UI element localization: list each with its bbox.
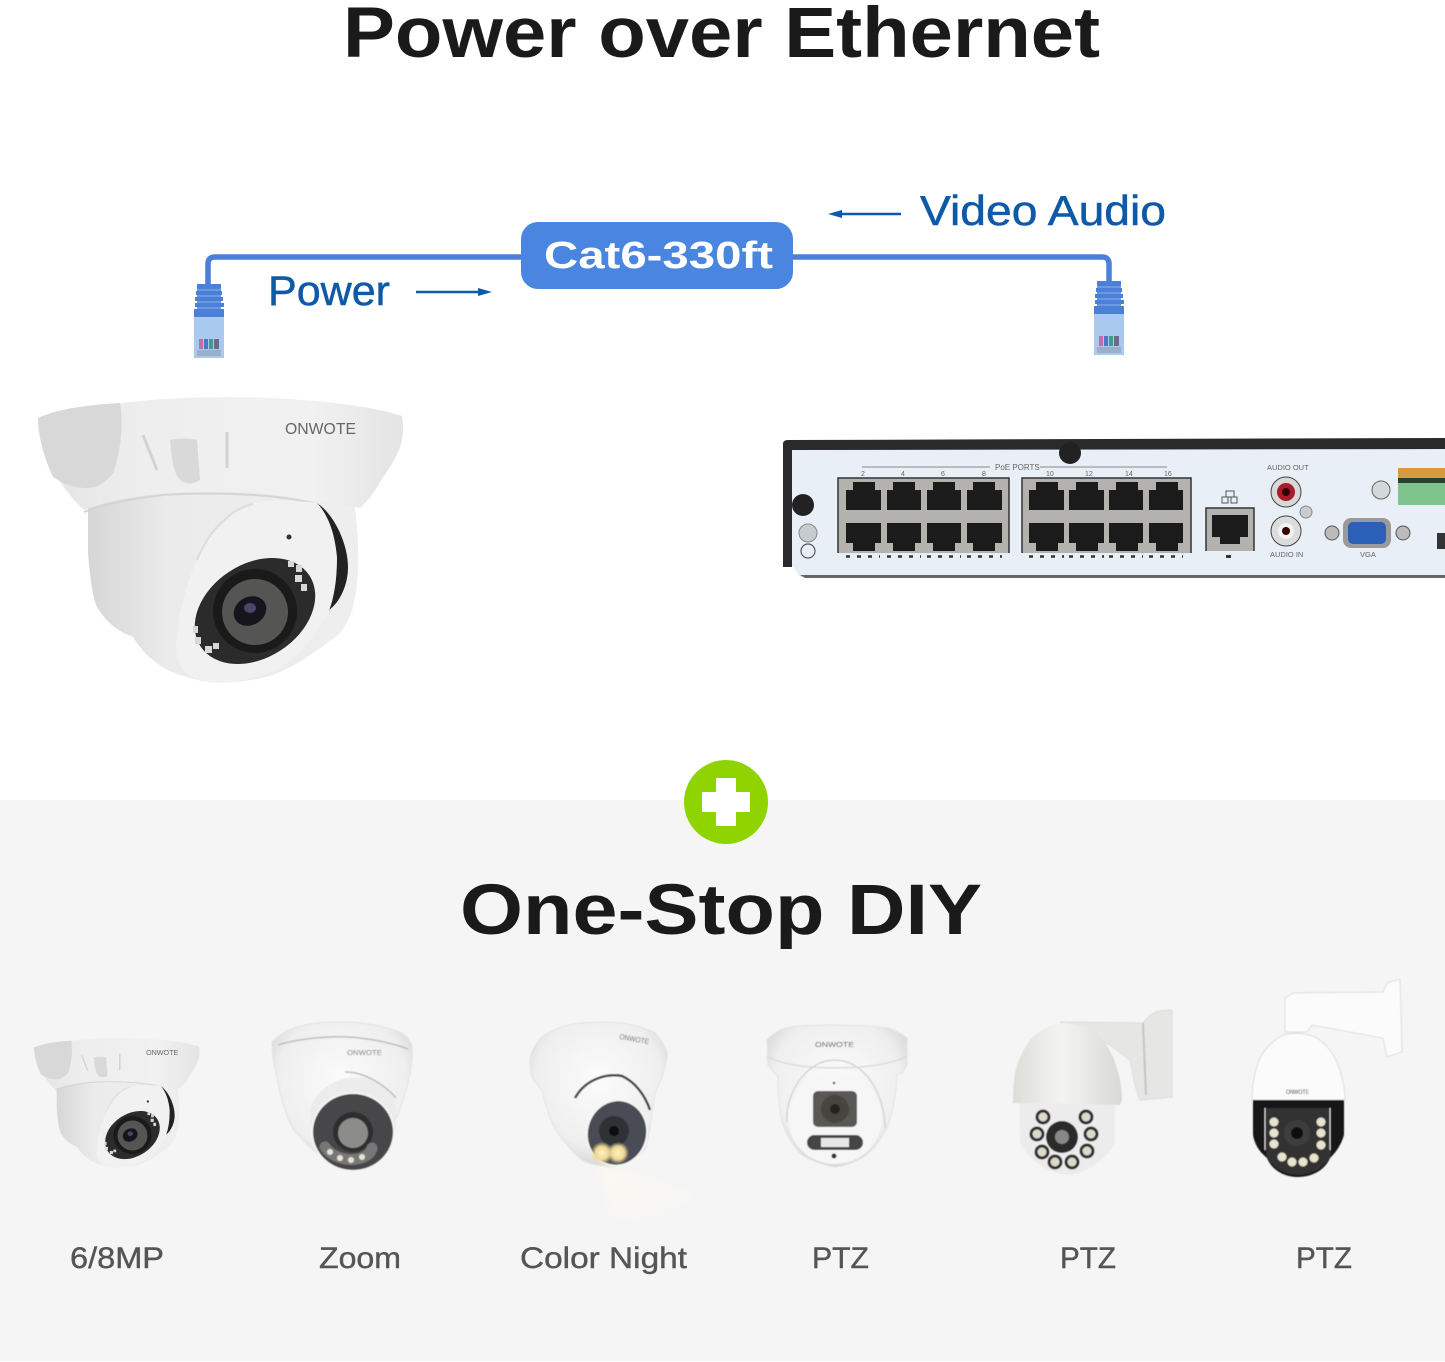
port numbers: 14 bbox=[1125, 471, 1133, 478]
label: PTZ: PTZ bbox=[812, 1242, 869, 1275]
PoE ports label: PoE PORTS bbox=[995, 463, 1040, 472]
ball housing bbox=[176, 501, 337, 682]
warm LED glow bbox=[591, 1142, 613, 1164]
LEDs bbox=[327, 1149, 365, 1163]
port numbers: 12 bbox=[1085, 471, 1093, 478]
product: PTZ turret camera: ONWOTE bbox=[815, 1040, 854, 1049]
lens bbox=[228, 590, 272, 632]
audio in jack bbox=[1270, 506, 1312, 559]
product: Zoom dome camera: ONWOTE bbox=[347, 1048, 382, 1057]
connector: left RJ45 plug bbox=[194, 284, 224, 358]
plus badge bbox=[684, 760, 768, 844]
camera: large dome bbox=[38, 397, 403, 686]
NVR chassis bbox=[785, 449, 1445, 577]
badge: Cat6-330ft bbox=[521, 222, 793, 289]
audio in jack: AUDIO IN bbox=[1270, 550, 1303, 559]
black gap bbox=[317, 503, 348, 610]
dome head bbox=[1013, 1023, 1122, 1105]
brand label: ONWOTE bbox=[285, 421, 356, 438]
mount screws bbox=[1059, 442, 1081, 464]
VGA port: VGA bbox=[1360, 550, 1376, 559]
arrow: power direction bbox=[416, 288, 492, 296]
port numbers: 4 bbox=[901, 471, 905, 478]
port block 2 bbox=[1022, 478, 1191, 553]
dome head bbox=[1252, 1033, 1345, 1100]
product: 6/8MP dome camera bbox=[34, 1038, 200, 1169]
port numbers: 8 bbox=[982, 471, 986, 478]
badge: Cat6-330ft: Cat6-330ft bbox=[544, 235, 773, 277]
port numbers: 10 bbox=[1046, 471, 1054, 478]
label: PTZ: PTZ bbox=[1296, 1242, 1352, 1275]
lower head bbox=[1019, 1100, 1115, 1175]
label: Color Night: Color Night bbox=[520, 1242, 688, 1275]
NVR recorder back panel bbox=[783, 438, 1445, 578]
product: PTZ speed dome with side bracket bbox=[1013, 1010, 1172, 1175]
port indicators bbox=[846, 555, 1183, 558]
port numbers: 2 bbox=[861, 471, 865, 478]
arrow: video audio direction bbox=[828, 210, 901, 218]
label: Zoom: Zoom bbox=[319, 1242, 401, 1275]
audio out jack: AUDIO OUT bbox=[1267, 463, 1309, 472]
port numbers: 6 bbox=[941, 471, 945, 478]
wall bracket bbox=[1285, 979, 1402, 1057]
ground symbols bbox=[799, 524, 817, 542]
lens ring bbox=[175, 536, 335, 686]
LEDs bbox=[1270, 1118, 1326, 1166]
black lower head bbox=[1253, 1100, 1344, 1177]
cable diagram bbox=[194, 187, 1166, 358]
IR LEDs bbox=[193, 561, 307, 653]
product: Color Night dome camera: ONWOTE bbox=[619, 1032, 650, 1046]
product labels bbox=[70, 1242, 1352, 1275]
light beam bbox=[600, 1165, 700, 1222]
LAN port bbox=[1206, 491, 1254, 558]
product: PTZ speed dome with long bracket: ONWOTE bbox=[1286, 1090, 1309, 1096]
cable: left run bbox=[208, 257, 521, 286]
cable: right run bbox=[793, 257, 1109, 283]
label: PTZ: PTZ bbox=[1060, 1242, 1116, 1275]
terminal block bbox=[1372, 468, 1445, 505]
connector: right RJ45 plug bbox=[1094, 281, 1124, 355]
audio out jack bbox=[1267, 463, 1309, 507]
label: 6/8MP: 6/8MP bbox=[70, 1242, 164, 1275]
camera body bbox=[88, 485, 358, 682]
port numbers: 16 bbox=[1164, 471, 1172, 478]
product: Color Night dome camera bbox=[530, 1022, 667, 1171]
HDMI port bbox=[1437, 533, 1445, 549]
label: Power: Power bbox=[268, 267, 390, 314]
LED ring bbox=[1031, 1111, 1097, 1168]
port numbers bbox=[861, 471, 1172, 478]
product: PTZ speed dome with long bracket bbox=[1252, 979, 1402, 1177]
wall bracket bbox=[1060, 1010, 1172, 1100]
port block 1 bbox=[838, 478, 1009, 553]
camera cap bbox=[38, 397, 403, 510]
product: PTZ turret camera bbox=[767, 1025, 907, 1167]
panel: one-stop DIY background bbox=[0, 800, 1445, 1361]
heading: One-Stop DIY: One-Stop DIY bbox=[460, 871, 982, 950]
product: Zoom dome camera bbox=[272, 1022, 412, 1172]
VGA port bbox=[1325, 518, 1410, 559]
label: Video Audio: Video Audio bbox=[920, 187, 1166, 234]
